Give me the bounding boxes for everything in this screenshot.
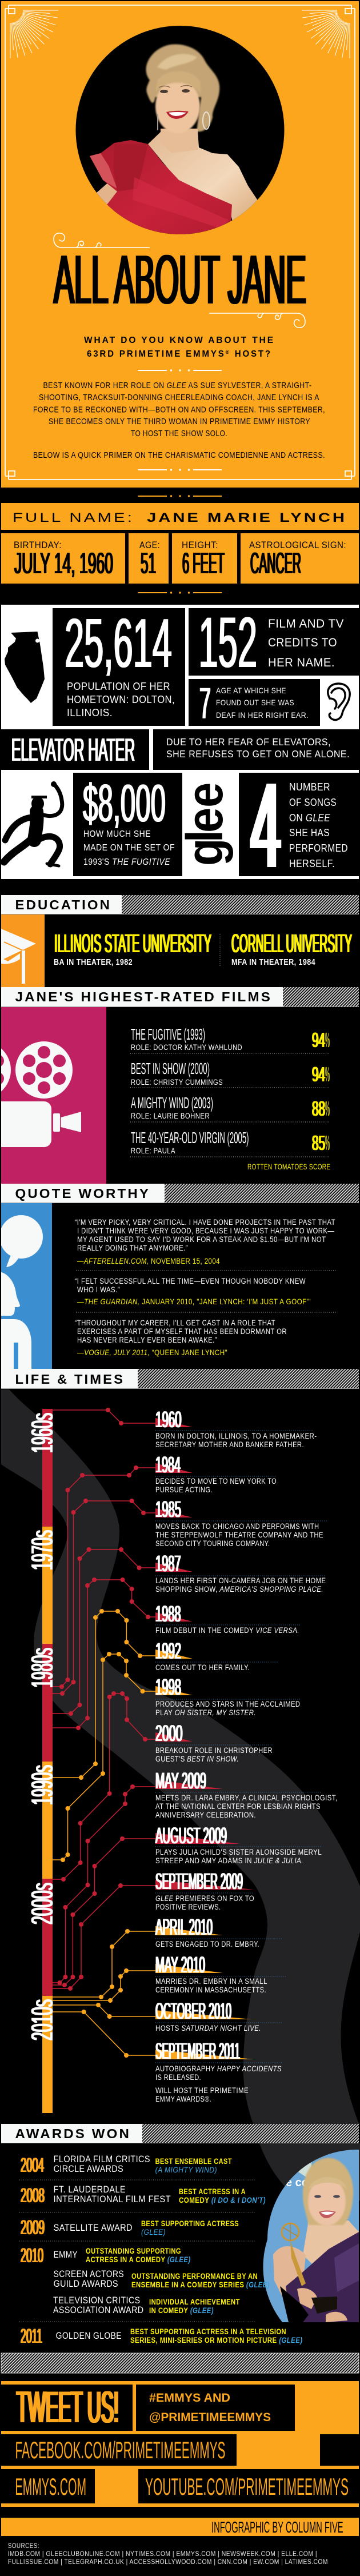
quote: AfterEllen: REALLY DOING THAT ANYMORE.” (77, 1244, 188, 1252)
heading: quotes: QUOTE WORTHY (15, 1186, 150, 1201)
event: April 2010: GETS ENGAGED TO DR. EMBRY. (155, 1940, 259, 1948)
award row: 2010 (21, 2244, 270, 2315)
sources: FULLISSUE.COM | TELEGRAPH.CO.UK | ACCESSHOLLYWOOD.COM | CNN.COM | EW.COM | LATIMES.COM (8, 2559, 328, 2566)
event: 1987: 1987 (155, 1551, 181, 1576)
award row: 2008: FT. LAUDERDALE (54, 2184, 126, 2195)
film: Best in Show: 94 (312, 1063, 325, 1086)
event: October 2010 (53, 1999, 282, 2032)
event: 2000: BREAKOUT ROLE IN CHRISTOPHER (155, 1746, 273, 1755)
photo: Jane with Emmy statue (263, 2143, 360, 2326)
subtitle: ® (226, 349, 231, 355)
icon: person speaking (0, 1203, 52, 1369)
call: hashtags: #EMMYS AND (149, 2391, 230, 2405)
heading: quotes (1, 1184, 359, 1203)
stat: age: AGE: (139, 540, 160, 550)
call: emmys.com (1, 2469, 95, 2503)
credit banner (1, 2518, 359, 2536)
event: 2000: GUEST'S BEST IN SHOW. (155, 1755, 239, 1763)
panel: awards list (19, 2154, 303, 2347)
event: May 2010 (53, 1952, 287, 2000)
event: 1987: LANDS HER FIRST ON-CAMERA JOB ON THE HOME (155, 1576, 326, 1585)
heading: awards: AWARDS WON (15, 2126, 131, 2141)
intro text: BEST KNOWN FOR HER ROLE ON GLEE AS SUE SYLVESTER, A STRAIGHT- (43, 381, 312, 390)
award row: 2011: 2011 (21, 2325, 42, 2347)
stat: birthday: BIRTHDAY: (14, 540, 62, 550)
event: 2000 (53, 1694, 273, 1879)
film: The Fugitive: 94 (312, 1028, 325, 1052)
timeline: decade bar: 1980s (25, 1648, 59, 1688)
award row: 2010: OUTSTANDING SUPPORTING (86, 2247, 181, 2255)
film: The Fugitive (130, 1025, 330, 1053)
background ribbon (1, 1389, 360, 2124)
event: August 2009: PLAYS JULIA CHILD'S SISTER ALONGSIDE MERYL (155, 1848, 322, 1856)
call: emmys.com: EMMYS.COM (15, 2473, 86, 2500)
award row: 2010: ACTRESS IN A COMEDY (GLEE) (86, 2255, 191, 2264)
fact: deaf ear: FOUND OUT SHE WAS (216, 698, 294, 707)
film: The 40-Year-Old Virgin: 85 (312, 1131, 325, 1155)
fact: credits: HER NAME. (268, 656, 335, 669)
quote: AfterEllen: —AFTERELLEN.COM, NOVEMBER 15, 2004 (77, 1257, 220, 1265)
award row: 2010: INDIVIDUAL ACHIEVEMENT (149, 2298, 240, 2306)
award row: 2004: BEST ENSEMBLE CAST (155, 2157, 232, 2166)
event: 1960: BORN IN DOLTON, ILLINOIS, TO A HOMEMAKER- (155, 1432, 317, 1440)
fact: songs performed: 4 (251, 757, 281, 893)
award row: 2004: 2004 (21, 2154, 44, 2176)
quote: The Guardian: —THE GUARDIAN, JANUARY 2010, "JANE LYNCH: 'I'M JUST A GOOF'" (77, 1297, 311, 1306)
intro text: SHOOTING, TRACKSUIT-DONNING CHEERLEADING COACH, JANE LYNCH IS A (39, 393, 319, 402)
event: 2000: 2000 (155, 1721, 183, 1746)
sources (8, 2543, 328, 2566)
school: Cornell: MFA IN THEATER, 1984 (231, 957, 315, 967)
award row: 2008: 2008 (21, 2184, 45, 2207)
heading: education (1, 895, 359, 914)
ornament: bottom flourish (209, 313, 305, 328)
fact: fugitive pay: MADE ON THE SET OF (83, 843, 175, 853)
heading: life and times (1, 1369, 359, 1389)
award row: 2008 (21, 2184, 266, 2207)
icon: Illinois map (5, 632, 45, 703)
fact: credits: 152 (199, 603, 257, 682)
film: The 40-Year-Old Virgin (130, 1129, 330, 1157)
photo: Jane with Emmy statue: e co (286, 2176, 309, 2189)
event: September 2009: GLEE PREMIERES ON FOX TO (155, 1894, 254, 1903)
event: 1985: 1985 (155, 1497, 181, 1522)
event: September 2011: AUTOBIOGRAPHY HAPPY ACCIDENTS (155, 2064, 282, 2073)
fact: fugitive pay: $8,000 (83, 773, 166, 833)
award row: 2008: INTERNATIONAL FILM FEST (54, 2194, 171, 2204)
fact: deaf ear: 7 (199, 679, 211, 728)
event: September 2009: POSITIVE REVIEWS. (155, 1903, 221, 1911)
subtitle: HOST? (231, 349, 272, 359)
award row: 2008: BEST ACTRESS IN A (179, 2187, 246, 2196)
award row: 2011: BEST SUPPORTING ACTRESS IN A TELEVISION (130, 2327, 286, 2336)
quote: The Guardian: WHO I WAS.” (77, 1285, 120, 1294)
event: May 2009 (53, 1768, 337, 1983)
event: 1960 (53, 1407, 317, 1449)
heading: films: JANE'S HIGHEST-RATED FILMS (15, 989, 272, 1004)
fact: songs performed: SHE HAS (289, 827, 330, 838)
event: 1988: 1988 (155, 1601, 181, 1627)
event: 1992: COMES OUT TO HER FAMILY. (155, 1663, 250, 1672)
header panel (1, 1, 359, 488)
text: SEPTEMBER 2009 (155, 1869, 243, 1894)
event: May 2009: AT THE NATIONAL CENTER FOR LESBIAN RIGHTS (155, 1802, 321, 1811)
timeline: decade bar: 2010s (25, 1999, 59, 2040)
film: A Mighty Wind (130, 1094, 330, 1122)
stat: birthday (1, 533, 125, 584)
event: September 2011: IS RELEASED. (155, 2073, 201, 2082)
quote: Vogue (74, 1319, 287, 1357)
award row: 2010: IN COMEDY (GLEE) (149, 2306, 214, 2315)
text: % (325, 1131, 330, 1155)
full name banner: JANE MARIE LYNCH (147, 510, 347, 525)
subtitle: WHAT DO YOU KNOW ABOUT THE (84, 336, 275, 345)
fact: songs performed: NUMBER (289, 781, 330, 793)
timeline: decade bar: 1970s (25, 1530, 59, 1570)
event: September 2011: WILL HOST THE PRIMETIME (155, 2086, 249, 2095)
stat: age: 51 (141, 547, 156, 580)
event: 1984 (53, 1452, 277, 1687)
stat: age (129, 533, 169, 584)
stat: height: 6 FEET (182, 547, 225, 580)
portrait of Jane Lynch (74, 25, 286, 240)
panel: quotes (0, 1203, 337, 1369)
fact: credits: CREDITS TO (268, 636, 337, 649)
ornament: top flourish (54, 233, 150, 247)
timeline: decade bar: 1960s (25, 1413, 59, 1453)
event: 1960: SECRETARY MOTHER AND BANKER FATHER. (155, 1440, 304, 1449)
sources: IMDB.COM | GLEECLUBONLINE.COM | NYTIMES.COM | EMMYS.COM | NEWSWEEK.COM | ELLE.COM | (8, 2551, 317, 2558)
film: Best in Show: BEST IN SHOW (2000) (131, 1060, 210, 1077)
film: The 40-Year-Old Virgin: ROLE: PAULA (131, 1147, 175, 1155)
award row: 2011: GOLDEN GLOBE (56, 2331, 122, 2341)
fact: population: ILLINOIS. (67, 706, 113, 718)
award row: 2008: COMEDY (I DO & I DON'T) (179, 2196, 266, 2204)
panel: social calls to action (1, 2381, 359, 2507)
film: A Mighty Wind: A MIGHTY WIND (2003) (131, 1094, 213, 1112)
award row: 2009: (GLEE) (141, 2228, 166, 2236)
event: 1985: THE STEPPENWOLF THEATRE COMPANY AND THE (155, 1531, 323, 1539)
event: 1988: FILM DEBUT IN THE COMEDY VICE VERSA. (155, 1626, 299, 1635)
quote: Vogue: EXERCISES A PART OF MYSELF THAT HAS BEEN DORMANT OR (77, 1327, 287, 1336)
stat: astrological sign: ASTROLOGICAL SIGN: (249, 540, 346, 550)
event: 1992: 1992 (155, 1639, 181, 1664)
award row: 2010: 2010 (21, 2244, 43, 2267)
event: 1985: SECOND CITY TOURING COMPANY. (155, 1539, 270, 1548)
event: May 2009: MAY 2009 (155, 1768, 206, 1794)
award row: 2009: BEST SUPPORTING ACTRESS (141, 2219, 239, 2228)
event: August 2009 (53, 1823, 322, 1985)
event: October 2010: OCTOBER 2010 (155, 1999, 231, 2024)
event: September 2009 (53, 1869, 254, 1988)
event: 1998: PLAY OH SISTER, MY SISTER. (155, 1708, 256, 1717)
quote: AfterEllen (74, 1218, 335, 1265)
heading: films (1, 987, 359, 1007)
film: Best in Show (130, 1060, 330, 1088)
quote: The Guardian (74, 1277, 311, 1306)
award row: 2004: FLORIDA FILM CRITICS (54, 2154, 150, 2164)
fact: deaf ear (189, 679, 320, 728)
fact: credits: FILM AND TV (268, 617, 344, 630)
heading: awards (1, 2124, 359, 2143)
event: 1960: 1960 (155, 1407, 182, 1432)
event: September 2011: EMMY AWARDS®. (155, 2095, 211, 2103)
sources: SOURCES: (8, 2543, 39, 2550)
intro text: TO HOST THE SHOW SOLO. (131, 429, 227, 438)
event: 1984: DECIDES TO MOVE TO NEW YORK TO (155, 1477, 277, 1485)
panel: films (0, 1007, 330, 1184)
quote: Vogue: —VOGUE, JULY 2011, “QUEEN JANE LYNCH” (77, 1348, 227, 1357)
icon: movie camera (0, 1007, 106, 1184)
event: 1984: 1984 (155, 1452, 181, 1477)
event: May 2010: MARRIES DR. EMBRY IN A SMALL (155, 1977, 267, 1986)
call: hashtags: @PRIMETIMEEMMYS (149, 2411, 271, 2424)
event: October 2010: HOSTS SATURDAY NIGHT LIVE. (155, 2024, 261, 2032)
award row: 2010: EMMY (54, 2250, 78, 2260)
panel: education (1, 914, 352, 987)
award row: 2009: 2009 (21, 2216, 45, 2239)
fact: fugitive pay: 1993'S THE FUGITIVE (83, 857, 170, 867)
fact: deaf ear: AGE AT WHICH SHE (216, 686, 286, 695)
fact: population (53, 604, 185, 726)
event: September 2011: SEPTEMBER 2011 (155, 2039, 240, 2064)
timeline: decade bar: 2000s (25, 1883, 59, 1924)
timeline: decade bar: 1990s (25, 1765, 59, 1805)
stat: birthday: JULY 14, 1960 (14, 547, 113, 580)
intro text (33, 381, 325, 460)
film: The Fugitive: THE FUGITIVE (1993) (131, 1025, 205, 1043)
text: % (325, 1097, 330, 1120)
fact: songs performed (239, 757, 359, 893)
film: The Fugitive: ROLE: DOCTOR KATHY WAHLUND (131, 1043, 242, 1052)
legend: score source: ROTTEN TOMATOES SCORE (247, 1163, 330, 1171)
event: 1992 (53, 1611, 278, 1778)
film: A Mighty Wind: 88 (312, 1097, 325, 1120)
event: 1985 (53, 1497, 327, 1694)
event: 1998: 1998 (155, 1675, 181, 1700)
full name banner (1, 503, 359, 530)
stat: height (172, 533, 237, 584)
award row: 2004 (21, 2154, 232, 2176)
quote: Vogue: “THROUGHOUT MY CAREER, I'LL GET CAST IN A ROLE THAT (74, 1319, 275, 1327)
call: hashtags (136, 2385, 295, 2431)
event: 1987 (53, 1549, 326, 1714)
fact: fugitive pay (73, 773, 182, 876)
fact: songs performed: HERSELF. (289, 858, 335, 869)
award row: 2010: ASSOCIATION AWARD (53, 2305, 144, 2315)
icon: running man (4, 781, 62, 866)
event: April 2010: APRIL 2010 (155, 1915, 213, 1940)
subtitle (84, 336, 275, 359)
icon: ear (328, 684, 350, 720)
award row: 2010: TELEVISION CRITICS (53, 2295, 141, 2306)
subtitle: 63RD PRIMETIME EMMYS (87, 349, 234, 359)
award row: 2010: OUTSTANDING PERFORMANCE BY AN (131, 2272, 258, 2281)
call: facebook (1, 2434, 237, 2466)
panel: social calls to action: TWEET US! (17, 2382, 119, 2432)
fact: population: POPULATION OF HER (67, 680, 170, 692)
film: Best in Show: ROLE: CHRISTY CUMMINGS (131, 1078, 223, 1087)
film: A Mighty Wind: ROLE: LAURIE BOHNER (131, 1112, 210, 1120)
award row: 2004: (A MIGHTY WIND) (155, 2166, 217, 2174)
call: tweet us (1, 2382, 133, 2432)
text: % (325, 1028, 330, 1052)
heading: education: EDUCATION (15, 897, 111, 912)
stat: height: HEIGHT: (182, 540, 218, 550)
vital stats row (1, 533, 359, 584)
event: August 2009: AUGUST 2009 (155, 1823, 227, 1848)
event: 1985: MOVES BACK TO CHICAGO AND PERFORMS WITH (155, 1522, 319, 1531)
award row: 2009: SATELLITE AWARD (54, 2223, 133, 2233)
fact: population: 25,614 (65, 604, 172, 682)
award row: 2004: CIRCLE AWARDS (54, 2164, 123, 2174)
event: 1988 (53, 1580, 302, 1728)
full name banner: FULL NAME: (13, 510, 134, 525)
quote: Vogue: HAS NEVER REALLY EVER BEEN AWAKE.” (77, 1336, 217, 1344)
fact: songs performed: OF SONGS (289, 797, 337, 808)
event: 1998: PRODUCES AND STARS IN THE ACCLAIMED (155, 1700, 301, 1708)
fact: elevator hater: DUE TO HER FEAR OF ELEVATORS, (166, 736, 331, 748)
text: % (325, 1063, 330, 1086)
event: May 2010: MAY 2010 (155, 1952, 205, 1978)
fact: songs performed: PERFORMED (289, 842, 348, 854)
heading: life and times: LIFE & TIMES (15, 1372, 125, 1387)
award row: 2011 (21, 2325, 303, 2347)
quote: The Guardian: “I FELT SUCCESSFUL ALL THE TIME—EVEN THOUGH NOBODY KNEW (74, 1277, 306, 1285)
event: September 2011 (53, 2012, 282, 2103)
event: 1984: PURSUE ACTING. (155, 1485, 213, 1494)
timeline: decade bar (25, 1409, 59, 2113)
award row: 2010: ENSEMBLE IN A COMEDY SERIES (GLEE) (131, 2281, 270, 2289)
school: Illinois State (54, 929, 211, 967)
school: Illinois State: BA IN THEATER, 1982 (54, 957, 133, 967)
fact: elevator hater: ELEVATOR HATER (11, 732, 135, 768)
fact: songs performed: ON GLEE (289, 812, 330, 824)
icon: sunburst right (302, 10, 350, 58)
event: May 2010: CEREMONY IN MASSACHUSETTS. (155, 1986, 266, 1994)
award row: 2010: GUILD AWARDS (54, 2279, 118, 2289)
logo: glee: glee (175, 782, 233, 866)
icon: graduation cap (1, 929, 36, 984)
icon: sunburst left (10, 10, 58, 58)
fact: fugitive pay: HOW MUCH SHE (83, 829, 151, 839)
fact: population: HOMETOWN: DOLTON, (67, 693, 175, 705)
event: May 2009: ANNIVERSARY CELEBRATION. (155, 1811, 256, 1819)
event: 1998 (53, 1654, 302, 1860)
event: August 2009: STREEP AND AMY ADAMS IN JULIE & JULIA. (155, 1856, 303, 1865)
panel: fun facts (1, 603, 359, 893)
event: 1987: SHOPPING SHOW, AMERICA'S SHOPPING PLACE. (155, 1585, 323, 1593)
award row: 2009 (21, 2216, 239, 2239)
award row: 2010: SCREEN ACTORS (54, 2269, 124, 2279)
stat: astrological sign (241, 533, 359, 584)
event: April 2010 (53, 1915, 282, 1997)
fact: deaf ear: DEAF IN HER RIGHT EAR. (216, 710, 309, 720)
intro text: SHE BECOMES ONLY THE THIRD WOMAN IN PRIMETIME EMMY HISTORY (49, 417, 310, 426)
fact: credits (189, 603, 359, 682)
award row: 2011: SERIES, MINI-SERIES OR MOTION PICTURE (GLEE) (130, 2336, 303, 2345)
